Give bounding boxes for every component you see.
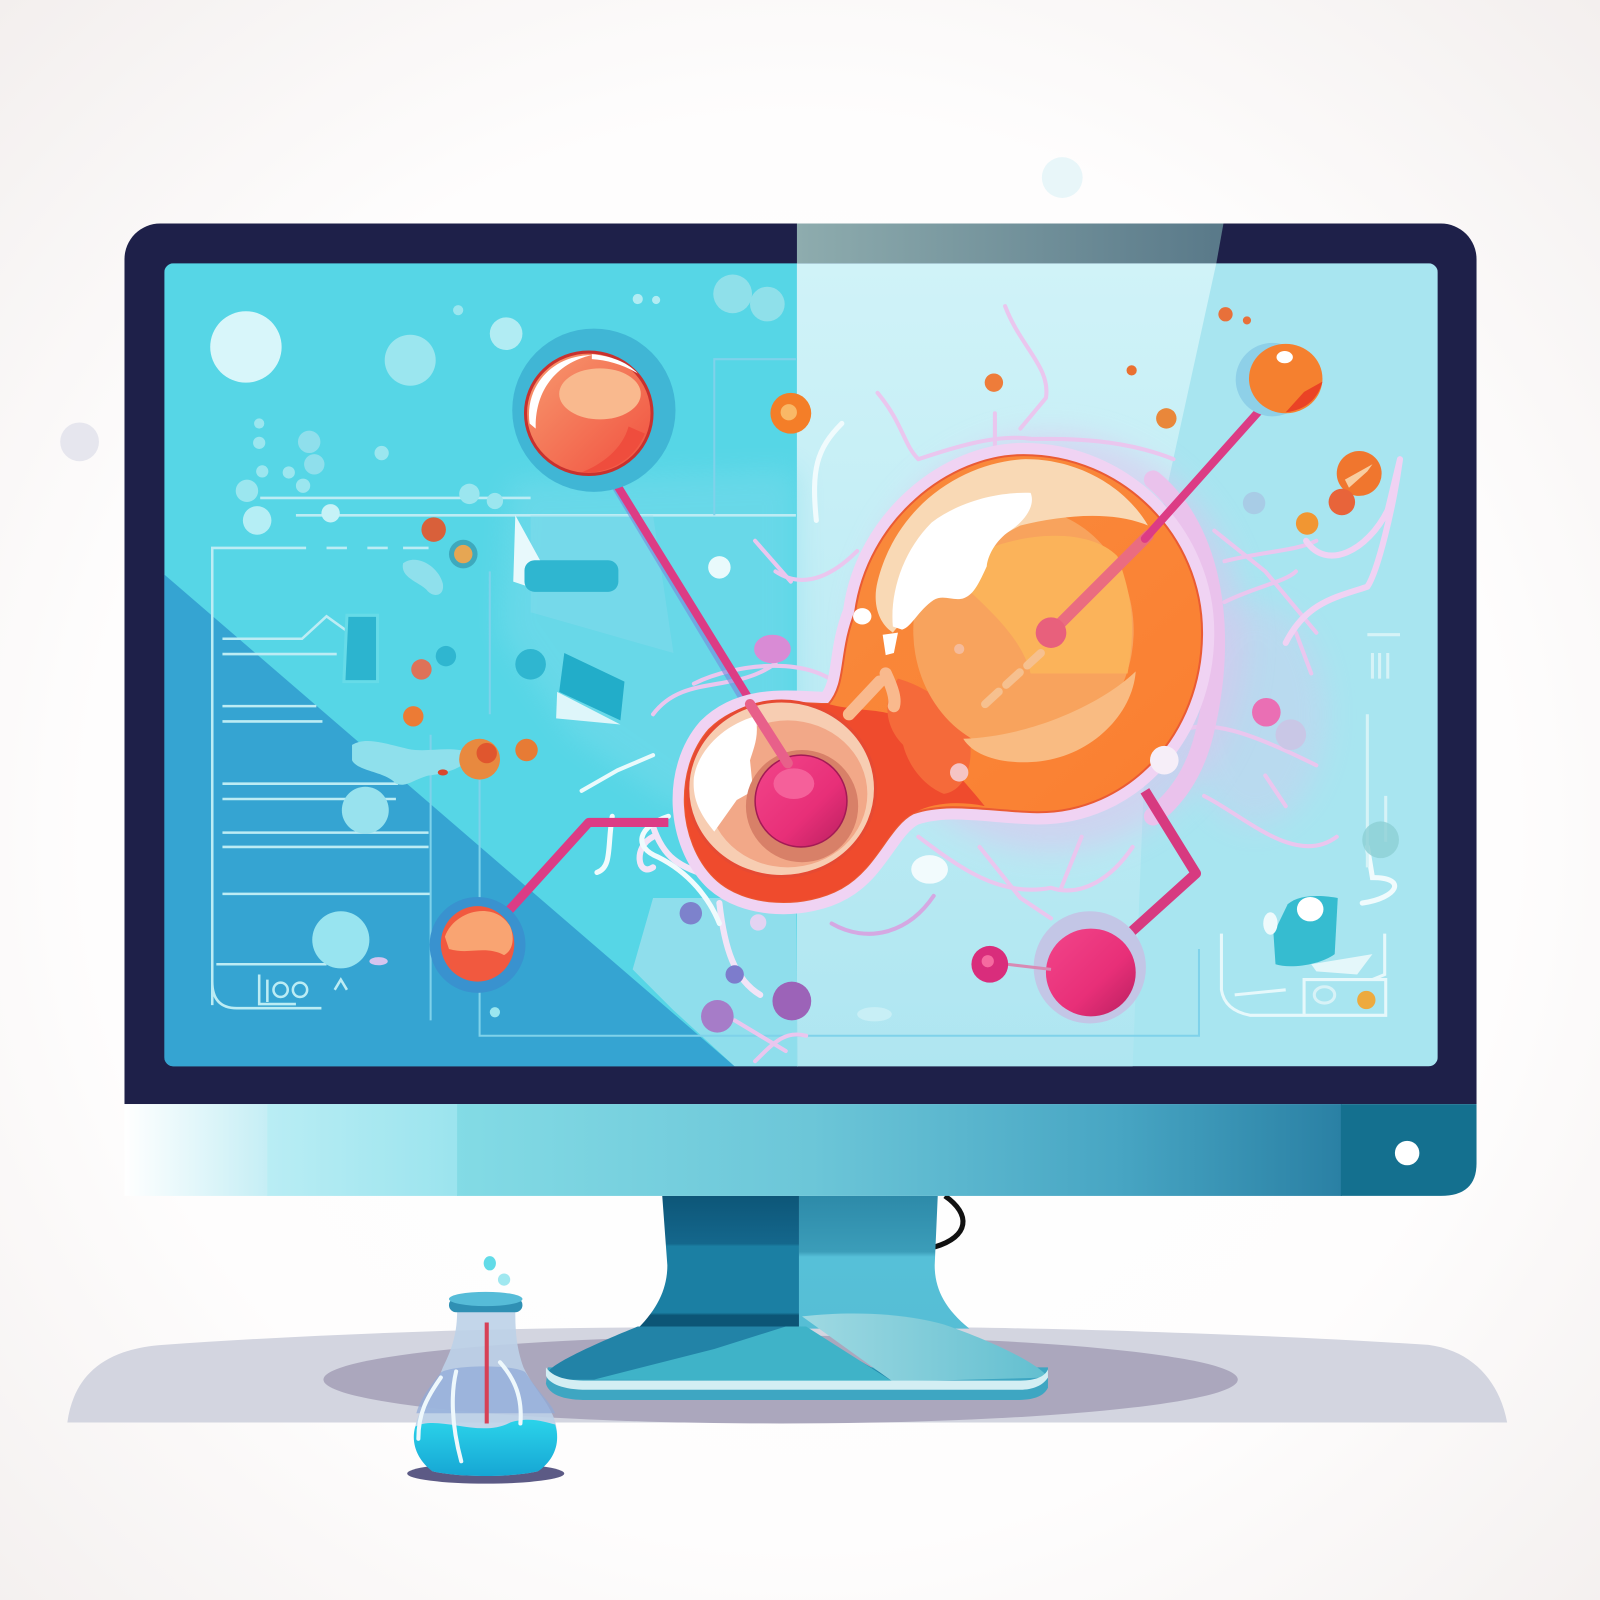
foot white band: [546, 1367, 1048, 1390]
small glass sphere with pink ball: [688, 701, 876, 877]
flask shadow: [407, 1463, 564, 1484]
small dial: [1314, 987, 1335, 1003]
teal pill: [524, 560, 618, 592]
screen: [164, 263, 1438, 1066]
top glassy cream cap: [876, 459, 1148, 633]
white squiggles: [597, 423, 1395, 923]
stand neck left: [638, 1196, 799, 1329]
pink ball: [755, 755, 847, 847]
teal widgets: [344, 515, 673, 785]
flask highlights: [418, 1362, 521, 1461]
flask body glass: [414, 1310, 557, 1476]
pale card behind pill: [531, 515, 673, 653]
chin right segment: [1341, 1104, 1477, 1196]
bezel glare: [797, 223, 1223, 263]
halo: [430, 897, 526, 993]
body: [441, 906, 514, 982]
chin left fade: [124, 1104, 268, 1196]
pink veins: [582, 306, 1400, 1061]
halo: [1034, 911, 1146, 1023]
white rim: [529, 355, 592, 429]
teal dot: [1362, 821, 1399, 858]
tilted teal card: [559, 653, 624, 720]
screen base right: [797, 263, 1438, 1066]
rod: ball two to sphere: [500, 822, 668, 920]
pale patch lower centre: [633, 898, 798, 1066]
inner light sphere: [913, 508, 1134, 753]
pink crescent right of sphere: [1153, 480, 1216, 816]
inner peach: [708, 720, 867, 867]
desk shadow: [67, 1328, 1507, 1423]
screen base left: [164, 263, 798, 1066]
large coral ball: [512, 329, 676, 492]
bezel: [124, 223, 1477, 1104]
central molecule blob: [685, 455, 1202, 902]
flask: [407, 1256, 564, 1484]
pink ball lower right: [1007, 911, 1146, 1023]
monitor: [124, 223, 1477, 1196]
lilac glow around big sphere: [928, 428, 1249, 856]
pink dot right: [1252, 698, 1281, 727]
purple dots: [680, 492, 1306, 1033]
pale cloud in centre: [500, 469, 796, 806]
peach strokes: [849, 673, 894, 714]
glass shell: [688, 701, 876, 877]
white dot: [1297, 897, 1323, 921]
left bottom blue lines: [431, 359, 1199, 1036]
chin main segment: [457, 1104, 1342, 1196]
foot base band: [546, 1367, 1048, 1400]
left data panel: [212, 498, 796, 1008]
outlines: [1221, 934, 1386, 1015]
lower red shade: [582, 427, 645, 473]
white highlight: [892, 493, 1032, 630]
body: [1046, 929, 1136, 1016]
orange ball upper right: [1236, 343, 1322, 416]
pale splash: [352, 741, 471, 785]
red lower lobe: [685, 703, 985, 902]
rod: ball one to pink ball, with shadow: [613, 486, 751, 698]
right scale lines: [1367, 635, 1400, 867]
teal vial: [344, 615, 378, 682]
yellow dot: [1357, 991, 1376, 1009]
halo: [512, 329, 676, 492]
halo: [1236, 343, 1309, 416]
foot left: [548, 1327, 893, 1380]
top highlight: [559, 368, 641, 419]
teal dots: [515, 649, 546, 680]
white triangle card: [513, 516, 540, 586]
connector: [1007, 964, 1051, 969]
white fleck: [883, 633, 898, 655]
blob body: [685, 455, 1202, 902]
red thread: [485, 1322, 489, 1423]
dark diagonal wedge: [164, 574, 735, 1066]
white reflection: [694, 716, 757, 832]
highlight: [445, 911, 513, 955]
foot right: [802, 1313, 1048, 1382]
body: [526, 352, 652, 474]
pale pink halo: [685, 455, 1202, 902]
foot centre: [594, 1327, 893, 1382]
teal blob: [1273, 896, 1338, 966]
body: [1249, 344, 1322, 413]
white highlight: [1277, 351, 1293, 363]
rod: lower right to pink ball: [1129, 788, 1201, 935]
red shade: [1286, 382, 1322, 412]
orange patch: [887, 679, 971, 794]
yellow upper zone: [972, 536, 1132, 674]
small pink ball: [971, 946, 1008, 983]
shadow ring: [746, 750, 858, 862]
chin light segment: [267, 1104, 458, 1196]
bottom right widget: [1221, 635, 1400, 1015]
decorative pale circle top: [1042, 157, 1083, 198]
white dot left: [1263, 912, 1278, 935]
pale dots on sphere: [950, 763, 968, 782]
stand neck right: [799, 1196, 969, 1329]
flask cap: [449, 1292, 522, 1312]
monitor stand: [546, 1196, 1048, 1400]
power button: [1395, 1141, 1419, 1165]
white blobs: [750, 855, 948, 1021]
pale floating circles: [210, 274, 785, 1017]
bottom crescent highlight: [963, 671, 1136, 762]
rod through big sphere: [980, 404, 1265, 709]
decorative pale circle left: [60, 422, 99, 461]
white fleck left edge: [853, 608, 871, 624]
lighter glass reflection: [797, 263, 1216, 1066]
small coral ball lower left: [430, 897, 526, 993]
flask mid shade: [416, 1366, 555, 1413]
pink ball highlight: [773, 768, 814, 799]
rod tip over pink ball: [750, 704, 788, 763]
orange particles: [403, 307, 1382, 780]
flask liquid: [414, 1420, 557, 1476]
cable: [935, 1196, 963, 1247]
white strip: [1311, 954, 1372, 974]
droplets: [484, 1256, 510, 1286]
